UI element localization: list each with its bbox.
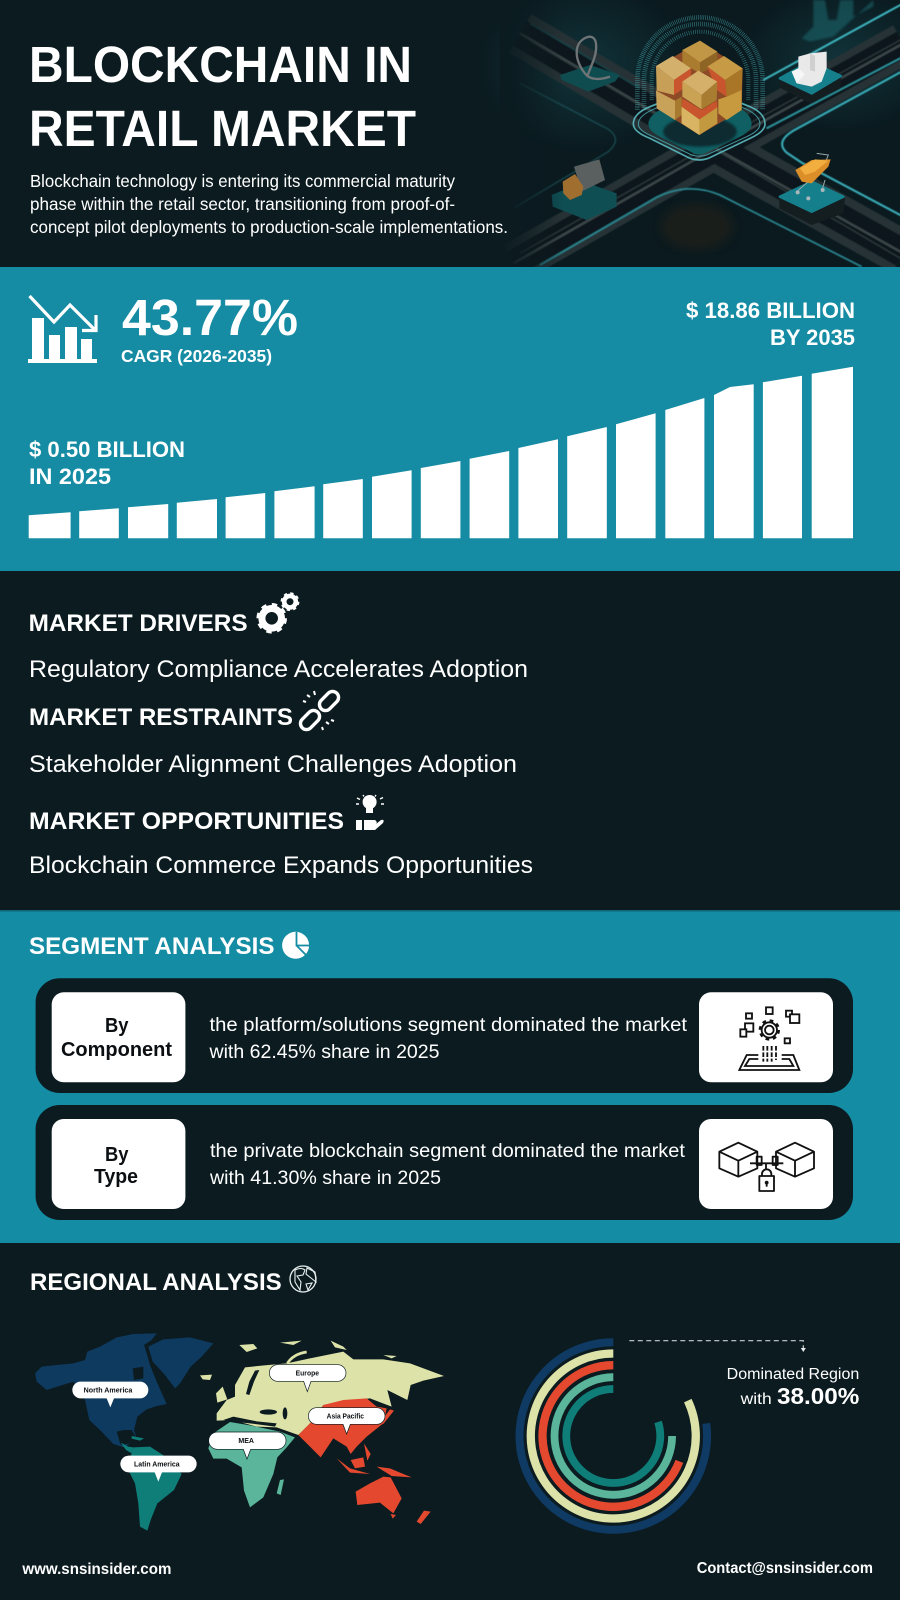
region: Asia Pacific [298,1398,431,1524]
text: component finding: with 62.45% share in 2025 [208,1041,440,1063]
2035 value label: $ 18.86 BILLION [686,298,855,323]
callout: Europe: Europe [296,1371,319,1378]
intro paragraph [30,171,508,237]
bar chart: market growth 2025-2035 [29,367,853,538]
text: component finding: the platform/solutions segment dominated the market [210,1014,688,1036]
label box: by type: By [105,1144,129,1166]
intro paragraph: phase within the retail sector, transitioning from proof-of- [30,194,455,214]
label box: by component: Component [61,1039,172,1061]
intro paragraph: concept pilot deployments to production-scale implementations. [30,217,508,237]
callout: MEA [209,1432,286,1459]
plate top right with white cubes [779,62,842,103]
CAGR label: CAGR (2026-2035) [121,346,272,366]
panel: market dynamics [29,594,533,879]
icon: gears [258,594,298,632]
icon: pie chart [282,932,310,959]
2035 value label [686,298,855,350]
footer: website: www.snsinsider.com [21,1561,171,1578]
heading: market drivers: MARKET DRIVERS [29,610,248,637]
callout: Europe [269,1365,346,1392]
text: component finding [208,1014,688,1063]
label box: by type [52,1119,185,1209]
callout: dominated region: 38.00% [777,1383,859,1409]
text: type finding [209,1140,686,1189]
region: Europe [200,1341,444,1435]
hero illustration: blockchain cubes on crossing roads [477,0,900,267]
label box: by component: By [105,1015,129,1037]
plate top left with stethoscope [560,65,620,92]
panel: market size [0,267,900,571]
2025 value label: IN 2025 [29,464,111,489]
title: RETAIL MARKET [29,100,416,157]
label box: by type: Type [94,1166,138,1188]
region: Latin America [121,1436,182,1531]
2025 value label: $ 0.50 BILLION [29,437,185,462]
card: by component [36,978,853,1093]
heading: segment analysis: SEGMENT ANALYSIS [29,933,274,960]
dome [637,17,763,110]
text: type finding: the private blockchain segment dominated the market [210,1140,686,1162]
icon: growth chart [28,296,97,363]
heading: market opportunities: MARKET OPPORTUNITIES [29,808,344,835]
inland seas [133,1367,287,1427]
2035 value label: BY 2035 [770,325,855,350]
icon: globe [290,1266,316,1292]
footer: contact: Contact@snsinsider.com [697,1560,873,1577]
callout: North America: North America [84,1387,132,1394]
2025 value label [29,437,185,489]
icon box: locked blocks [699,1119,833,1209]
radial chart: regional share [520,1342,707,1530]
card: by type [36,1105,853,1220]
label box: by component [52,992,185,1082]
dome base rings [648,90,752,155]
top right city silhouette [802,0,873,42]
plate bottom right with shopping cart [779,185,845,225]
callout: MEA: MEA [238,1438,254,1445]
callout: Asia Pacific: Asia Pacific [327,1414,364,1421]
title [29,36,416,157]
callout: North America [72,1382,148,1407]
world map with region callouts [35,1333,444,1531]
text: type finding: with 41.30% share in 2025 [209,1167,441,1189]
text: opportunity: Blockchain Commerce Expands Opportunities [29,852,533,879]
callout: Latin America: Latin America [134,1461,180,1468]
icon box: platform gear [699,992,833,1082]
text: driver: Regulatory Compliance Accelerates Adoption [29,656,528,683]
callout: Asia Pacific [308,1408,385,1434]
gold cubes [657,42,743,135]
leader arrow to dominated region [629,1341,806,1352]
intro paragraph: Blockchain technology is entering its commercial maturity [30,171,455,191]
icon: broken chain [298,689,341,732]
panel: segment analysis [0,910,900,1243]
callout: Latin America [120,1456,197,1482]
callout: dominated region: Dominated Region [727,1366,859,1383]
plate bottom left with truck [552,182,617,220]
region: North America [35,1333,213,1447]
heading: market restraints: MARKET RESTRAINTS [29,704,293,731]
region: MEA [208,1422,295,1507]
title: BLOCKCHAIN IN [29,36,412,93]
text: restraint: Stakeholder Alignment Challenges Adoption [29,751,517,778]
CAGR value: 43.77% [122,289,298,346]
callout: dominated region: with [740,1391,772,1408]
callout: dominated region [727,1366,859,1409]
icon: idea in hand [356,795,384,830]
heading: regional analysis: REGIONAL ANALYSIS [30,1269,282,1296]
